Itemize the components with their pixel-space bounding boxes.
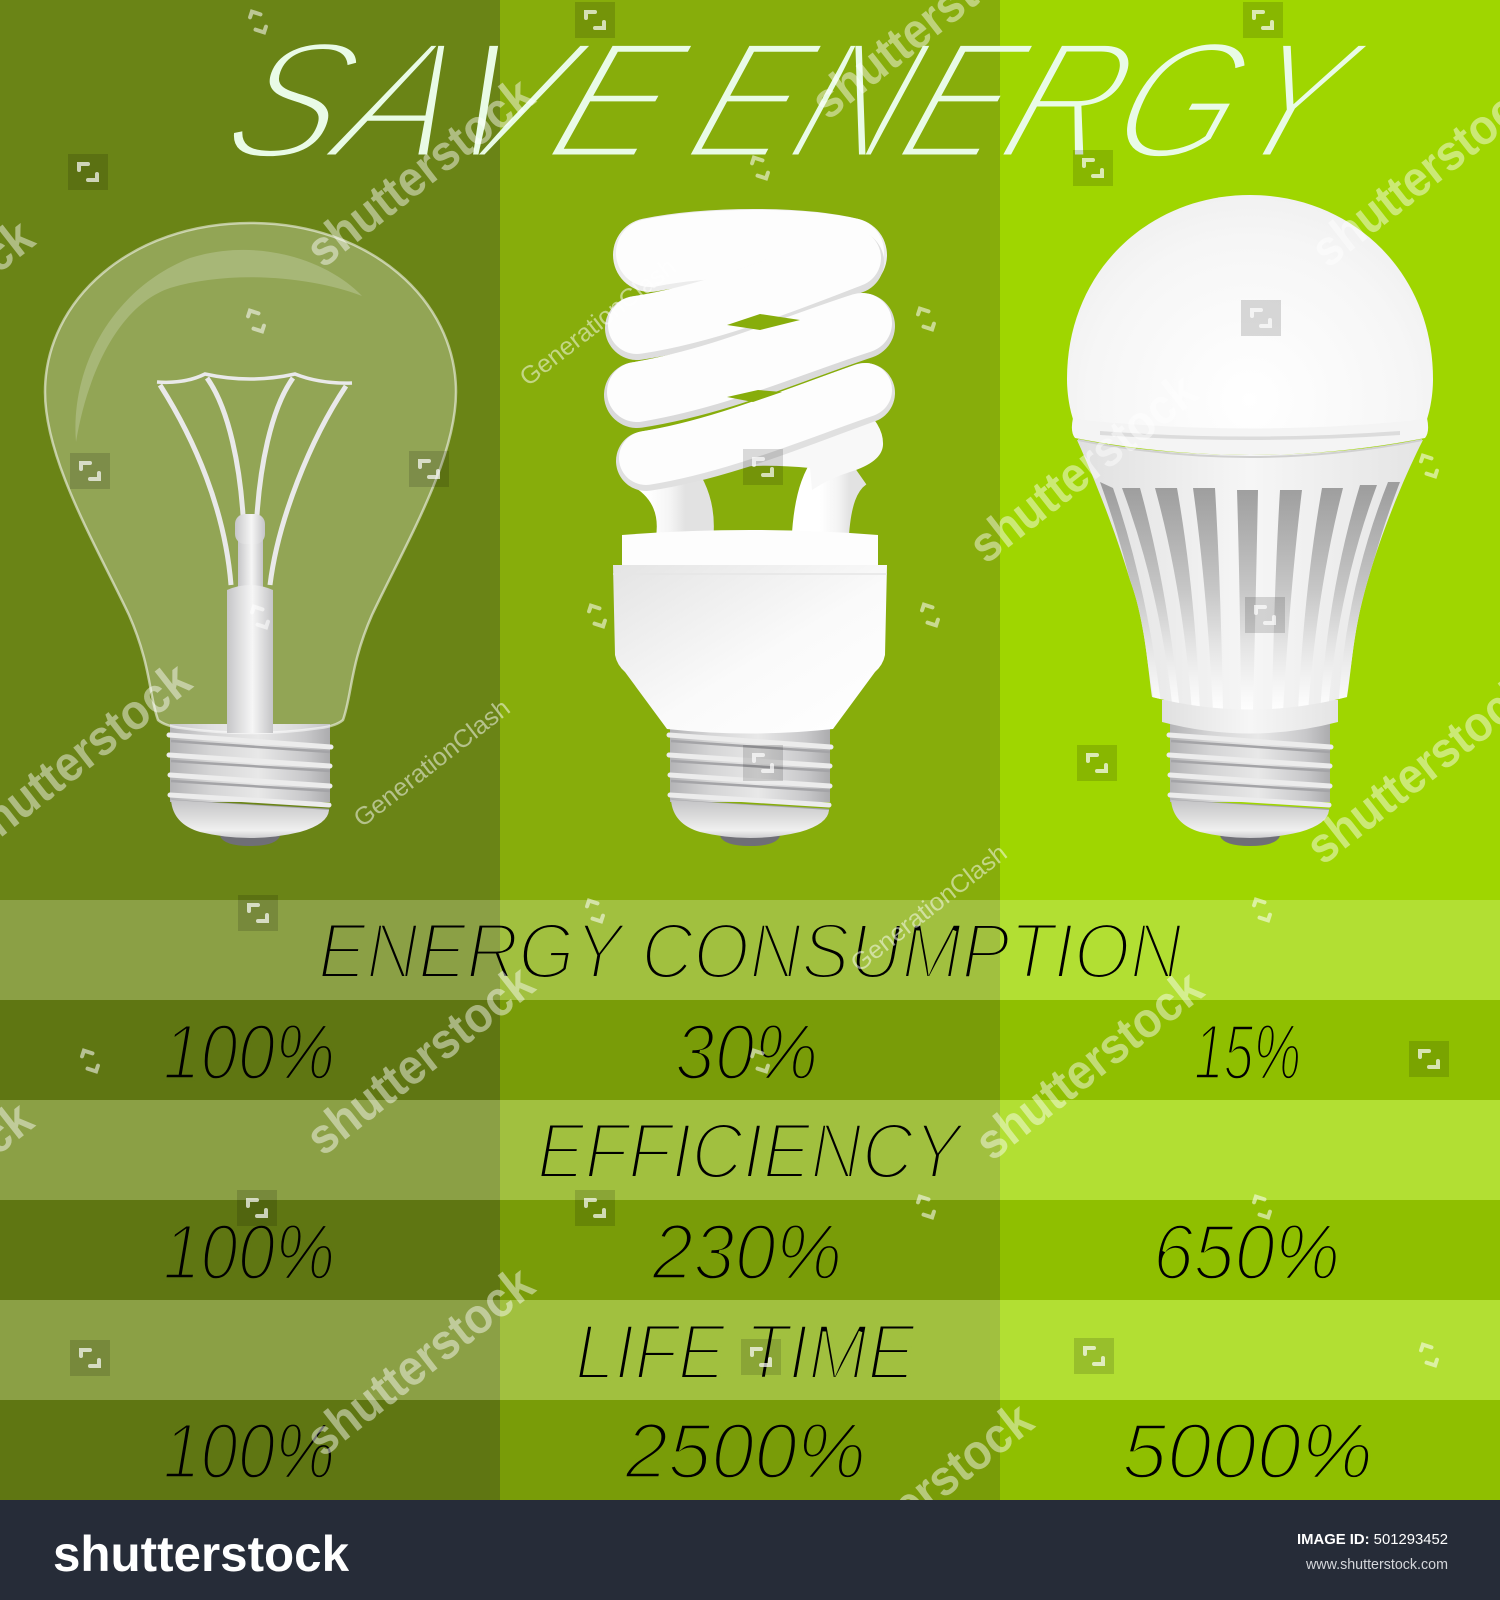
value: life time LED: 5000% [1122,1406,1373,1495]
heading: efficiency: EFFICIENCY [537,1106,966,1195]
watermark: stock photo overlay: shutterstock [958,362,1207,574]
value: efficiency LED: 650% [1153,1207,1340,1296]
value: efficiency fluorescent: 230% [651,1207,842,1296]
dome [1067,195,1433,428]
heading: energy consumption: ENERGY CONSUMPTION [318,906,1183,995]
filament wires [157,374,352,585]
footer url: www.shutterstock.com [1305,1556,1448,1573]
ballast housing [613,530,887,734]
value: energy consumption incandescent: 100% [163,1007,335,1096]
heading: life time: LIFE TIME [575,1307,916,1396]
spiral coils [637,244,865,461]
glass envelope [45,223,456,733]
watermark: stock photo overlay: shutterstock [295,954,544,1166]
ring [1072,418,1428,455]
watermark: stock photo overlay: shutterstock [794,1391,1043,1600]
heat sink slots [1100,482,1400,712]
title: SAVE [203,6,711,194]
watermark: stock photo overlay: shutterstock [295,1255,544,1467]
icon: LED bulb [1067,195,1433,846]
footer logo: shutterstock [53,1526,349,1582]
heat sink body [1077,440,1423,710]
panel: data table [0,900,1500,1500]
value: efficiency incandescent: 100% [163,1207,335,1296]
icon: incandescent bulb [45,223,456,846]
watermark: stock photo overlay: GenerationClash [514,253,681,392]
value: energy consumption LED: 15% [1194,1007,1301,1096]
footer image id: IMAGE ID: 501293452 [1297,1531,1448,1548]
watermark: stock photo overlay: shutterstock [295,66,544,278]
coil windows [727,314,800,402]
glass highlight [75,250,362,442]
watermark: stock photo overlay: GenerationClash [348,694,515,833]
title: ENERGY [668,6,1388,194]
tube legs [648,461,850,542]
value: life time incandescent: 100% [163,1406,335,1495]
stem [227,514,273,733]
icon: compact fluorescent bulb [613,244,887,846]
title [203,6,1388,194]
neck collar [1162,700,1338,734]
value: energy consumption fluorescent: 30% [675,1007,818,1096]
watermark: stock photo overlay: GenerationClash [845,839,1012,978]
panel: column backgrounds [0,0,1500,900]
value: life time fluorescent: 2500% [624,1406,866,1495]
watermark: stock photo overlay: shutterstock [964,959,1213,1171]
lowest coil lower edge [680,405,883,490]
footer bar [0,1500,1500,1600]
